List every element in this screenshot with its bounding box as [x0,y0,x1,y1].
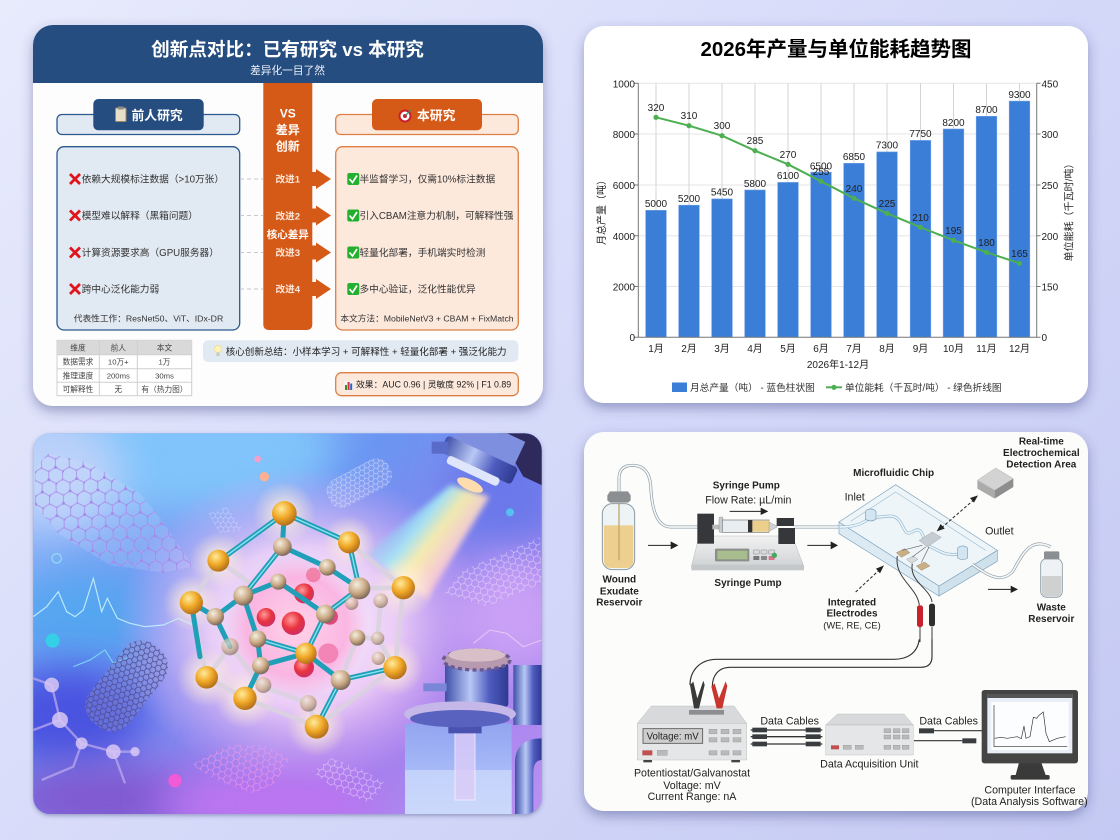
left axis ticks: 2000 [613,282,635,294]
connector dashes [240,179,263,289]
bar value labels: 5200 [678,194,701,205]
spectrum line [33,578,197,627]
comparison table: 数据需求 [63,356,94,366]
month labels [648,343,1030,355]
bar value labels: 8200 [942,118,965,129]
detection cube [977,468,1013,499]
graphene sheet bottom [192,745,290,793]
arrow heads [671,508,1018,593]
center column: differences: 改进3 [276,247,300,259]
potentiostat [637,706,747,762]
bar value labels: 9300 [1008,90,1031,101]
label: integrated electrodes: Integrated [828,598,876,609]
bond highlights [227,518,384,716]
left axis ticks: 1000 [613,80,635,90]
core innovation summary: 核心创新总结：小样本学习 + 可解释性 + 轻量化部署 + 强泛化能力 [226,346,507,358]
comparison table [57,340,192,396]
waste bottle [1041,551,1062,597]
month labels: 3月 [714,343,730,355]
panel: microfluidic system diagram [584,432,1088,811]
axes [634,83,1040,337]
left axis ticks: 8000 [613,130,635,141]
month labels: 9月 [913,343,928,355]
comparison table: 推理速度 [63,370,94,380]
header band [33,25,543,83]
data cables [751,730,822,744]
right connectors [919,728,976,743]
line value labels: 225 [879,199,896,210]
label: wound exudate reservoir [596,575,642,609]
month labels: 7月 [846,343,862,355]
label: computer interface: Computer Interface [984,785,1076,797]
center column: differences: 核心差异 [267,228,309,241]
month labels: 8月 [879,343,895,355]
bar value labels: 7750 [909,129,932,140]
label: detection area [1003,437,1080,470]
label: inlet: Inlet [845,492,865,504]
label: computer interface [971,785,1088,808]
comparison table: 30ms [155,371,174,380]
label: potentiostat: Current Range: nA [648,791,737,803]
results box [336,373,518,396]
panel: this study list: 半监督学习，仅需10%标注数据 [360,172,495,186]
month labels: 1月 [648,343,664,355]
electrode wires [897,556,932,642]
core innovation summary [203,340,518,362]
legend: 月总产量（吨） - 蓝色柱状图 [690,381,815,394]
label: wound exudate reservoir: Reservoir [596,598,642,609]
data acquisition unit [826,714,913,755]
center column: differences: 改进2 [276,210,300,222]
line value labels: 210 [912,213,929,224]
label: daq: Data Acquisition Unit [820,758,919,770]
label: potentiostat [634,767,750,803]
heading: previous research [57,99,240,134]
panel: previous research list: 模型难以解释（黑箱问题） [82,209,198,222]
graphene lattice top left [35,453,193,573]
month labels: 11月 [976,343,997,355]
heading: previous research: 前人研究 [132,108,183,123]
left axis title: 月总产量（吨） [595,175,608,245]
label: detection area: Real-time [1019,437,1064,448]
line value labels: 240 [846,184,863,195]
silver atoms [207,537,370,690]
graphene sheet top left [49,476,192,572]
center column: differences: 差异 [276,122,300,137]
potentiostat: Voltage: mV [647,731,699,742]
carbon nanotube left [85,640,168,732]
panel: previous research list: 依赖大规模标注数据（>10万张） [82,172,224,186]
molecule front bonds [190,516,384,718]
panel: nanomaterial illustration [30,432,544,818]
flow arrows [648,511,1012,589]
panel: this study list: 轻量化部署，手机端实时检测 [360,246,485,259]
comparison table: 本文 [157,342,172,352]
label: detection area: Electrochemical [1003,448,1080,459]
line value labels: 320 [648,103,665,114]
faint nodes [44,678,140,759]
heading: this study: 本研究 [417,108,456,123]
legend [672,381,1002,394]
x axis title: 2026年1-12月 [807,358,869,371]
subtitle: 差异化一目了然 [250,64,325,77]
line value labels: 270 [780,150,797,161]
comparison table: 前人 [111,342,126,352]
right axis ticks: 450 [1042,80,1059,90]
central glow [123,474,472,774]
right cables [914,731,982,741]
tubing [619,465,841,527]
legend: 单位能耗（千瓦时/吨） - 绿色折线图 [845,381,1002,394]
month labels: 4月 [747,343,763,355]
light beam [367,485,489,600]
left axis ticks [613,80,635,344]
comparison table: 1万 [159,358,171,366]
right axis title: 单位能耗（千瓦时/吨） [1062,159,1076,261]
center column: differences: 创新 [276,138,300,154]
label: integrated electrodes [823,598,881,630]
label: wound exudate reservoir: Exudate [600,586,639,597]
right axis ticks: 250 [1042,181,1059,192]
grid [638,83,1037,286]
icon: wound exudate bottle [602,491,635,570]
comparison table: 200ms [107,371,130,380]
outlet tube [972,544,1051,578]
heading: this study [336,99,518,134]
label: computer interface: (Data Analysis Software) [971,796,1088,808]
faint molecule lower left [33,678,137,783]
bar value labels: 6850 [843,152,866,163]
label: integrated electrodes: Electrodes [826,609,878,620]
panel: previous research list: 计算资源要求高（GPU服务器） [82,246,219,259]
panel: this study list: 引入CBAM注意力机制，可解释性强 [360,209,514,222]
line value labels: 180 [978,238,995,249]
microfluidic chip [839,485,997,596]
comparison table: 有（热力图） [141,384,188,394]
right axis ticks: 300 [1042,130,1059,141]
left axis ticks: 6000 [613,181,635,192]
month labels: 2月 [681,343,697,355]
spectrum line right [473,630,542,647]
label: wound exudate reservoir: Wound [603,575,636,586]
panel: innovation comparison [33,25,543,406]
line value labels: 195 [945,226,962,237]
molecule back bonds [191,542,403,727]
line value labels: 285 [747,136,764,147]
line: unit energy consumption [653,115,1022,266]
wires to potentiostat [690,639,932,687]
line value labels: 165 [1011,249,1028,260]
bar value labels: 5800 [744,179,767,190]
label: waste reservoir: Reservoir [1028,614,1074,625]
panel: previous research list: 跨中心泛化能力弱 [82,282,159,296]
right axis ticks: 150 [1042,282,1059,294]
cable connectors [752,728,821,746]
center column: differences: VS [280,106,296,120]
bar value labels: 5000 [645,199,668,210]
carbon nanotube top [326,458,392,508]
center column: differences: 改进4 [276,284,301,296]
label: data cables left: Data Cables [760,715,819,727]
left axis ticks: 4000 [613,232,635,243]
label: potentiostat: Voltage: mV [663,780,722,792]
label: potentiostat: Potentiostat/Galvanostat [634,767,750,779]
graphene sheet bottom right [312,758,385,803]
lower diagram [634,639,1088,808]
month labels: 12月 [1009,343,1030,355]
upper diagram [596,437,1080,642]
bar value labels: 6100 [777,171,800,182]
line value labels: 300 [714,121,731,132]
month labels: 6月 [813,343,829,355]
line value labels: 255 [813,167,830,178]
syringe pump device [691,514,804,570]
results box: 效果：AUC 0.96 | 灵敏度 92% | F1 0.89 [356,378,511,390]
label: outlet: Outlet [985,526,1014,538]
red and black clips [917,604,935,627]
right axis ticks [1042,80,1059,344]
atom sparkle glows [163,482,435,757]
label: waste reservoir: Waste [1037,603,1066,614]
label: detection area: Detection Area [1006,459,1077,470]
panel: this study list: 本文方法：MobileNetV3 + CBAM + FixMatch [340,312,514,324]
label: integrated electrodes: (WE, RE, CE) [823,620,881,630]
month labels: 5月 [780,343,796,355]
dashed arrows [856,500,974,592]
label: syringe pump bottom: Syringe Pump [714,578,782,589]
center column: differences [263,83,312,330]
chart title: 2026年产量与单位能耗趋势图 [700,37,972,61]
left axis ticks: 0 [629,333,635,344]
computer monitor [982,690,1078,780]
panel: production and energy chart [584,26,1088,403]
line value labels [648,103,1028,260]
panel: this study list: 多中心验证，泛化性能优异 [360,282,476,296]
back atoms [221,593,388,712]
panel: this study list [336,147,518,330]
bar value labels: 7300 [876,140,899,152]
label: waste reservoir [1028,603,1074,625]
graphene sheet right [445,537,542,607]
label: chip: Microfluidic Chip [853,468,934,479]
title: 创新点对比：已有研究 vs 本研究 [151,39,424,60]
faint sheet [208,507,243,533]
arrows [312,169,331,299]
bar value labels: 6500 [810,162,833,172]
panel: previous research list [57,147,240,330]
label: data cables right: Data Cables [919,715,978,727]
panel: previous research list: 代表性工作：ResNet50、ViT、IDx-DR [74,312,223,324]
dashed arrow heads [876,495,978,573]
alligator clips [690,681,727,708]
spectrum line lower [73,650,130,667]
comparison table: 10万+ [108,358,129,366]
bar value labels: 5450 [711,188,734,198]
comparison table: 维度 [70,342,86,352]
core glow and reactive spheres [230,560,364,692]
comparison table: 可解释性 [63,384,94,394]
gold atoms [180,501,415,739]
lamp top right [432,433,542,493]
line value labels: 310 [681,111,698,122]
bars: monthly output [646,101,1030,337]
colored dots [46,456,514,787]
reactor bottom right [404,648,542,814]
month labels: 10月 [943,343,964,355]
label: flow rate: Flow Rate: µL/min [705,494,791,506]
center column: differences: 改进1 [276,174,301,186]
bar value labels: 8700 [975,105,998,116]
comparison table: 无 [114,385,122,394]
label: syringe pump top: Syringe Pump [713,480,780,491]
bar value labels [645,90,1031,210]
right axis ticks: 200 [1042,232,1059,243]
right axis ticks: 0 [1042,333,1048,344]
